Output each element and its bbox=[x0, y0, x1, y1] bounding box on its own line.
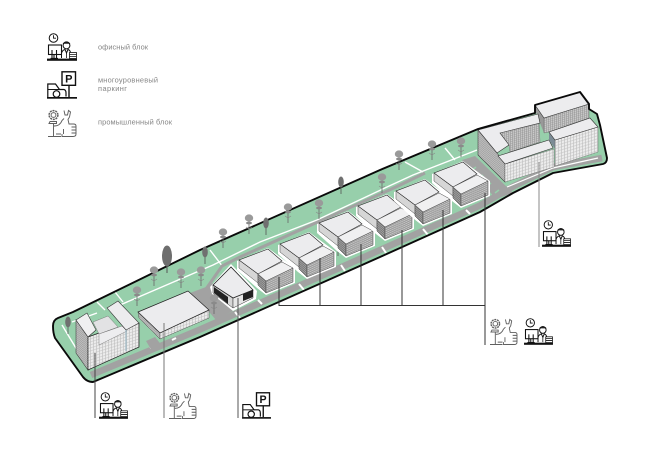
icon: row office bbox=[524, 319, 553, 345]
plaza by parking bbox=[190, 283, 233, 320]
callout icons bbox=[99, 221, 571, 419]
footpaths bbox=[62, 148, 598, 368]
industrial block 6 bbox=[432, 161, 490, 208]
tree row bbox=[65, 316, 71, 334]
legend bbox=[47, 34, 173, 137]
tree behind blocks bbox=[335, 238, 341, 256]
legend label: office block: офисный блок bbox=[98, 42, 149, 52]
lower road bbox=[91, 158, 602, 375]
industrial block 3 bbox=[317, 211, 375, 258]
icon: west office bbox=[99, 393, 128, 419]
legend label: multi-level parking: паркинг bbox=[98, 84, 127, 93]
east office complex bbox=[478, 92, 598, 182]
leader: shed bbox=[163, 323, 165, 418]
leader: industrial row bbox=[279, 193, 485, 345]
plaza stripes bbox=[472, 167, 499, 193]
industrial block 1 bbox=[237, 248, 295, 295]
industrial block 2 bbox=[278, 232, 336, 279]
industrial block 4 bbox=[356, 194, 414, 241]
leader: east office bbox=[538, 162, 540, 247]
site ground bbox=[53, 92, 607, 382]
leader: parking bbox=[237, 298, 239, 418]
industrial shed bbox=[138, 291, 209, 339]
west office building bbox=[76, 301, 139, 370]
leader lines bbox=[95, 162, 539, 418]
legend label: industrial block: промышленный блок bbox=[98, 118, 173, 126]
parking building bbox=[210, 264, 257, 311]
icon: shed industrial bbox=[169, 393, 196, 419]
legend icon: industrial block bbox=[48, 110, 76, 136]
site boundary bbox=[53, 92, 607, 382]
small plaza by shed bbox=[146, 337, 163, 351]
legend label: multi-level parking: многоуровневый bbox=[98, 76, 158, 84]
legend icon: office block bbox=[47, 34, 77, 61]
service road behind blocks bbox=[206, 173, 425, 289]
trees bbox=[65, 137, 465, 334]
icon: row industrial bbox=[490, 319, 517, 345]
site plan bbox=[53, 92, 607, 382]
icon: parking bbox=[242, 393, 271, 419]
plaza by east block bbox=[462, 156, 513, 199]
legend icon: multi-level parking bbox=[47, 72, 77, 99]
leader: west office bbox=[94, 353, 96, 418]
icon: east office bbox=[542, 221, 571, 247]
industrial block 5 bbox=[394, 179, 452, 226]
